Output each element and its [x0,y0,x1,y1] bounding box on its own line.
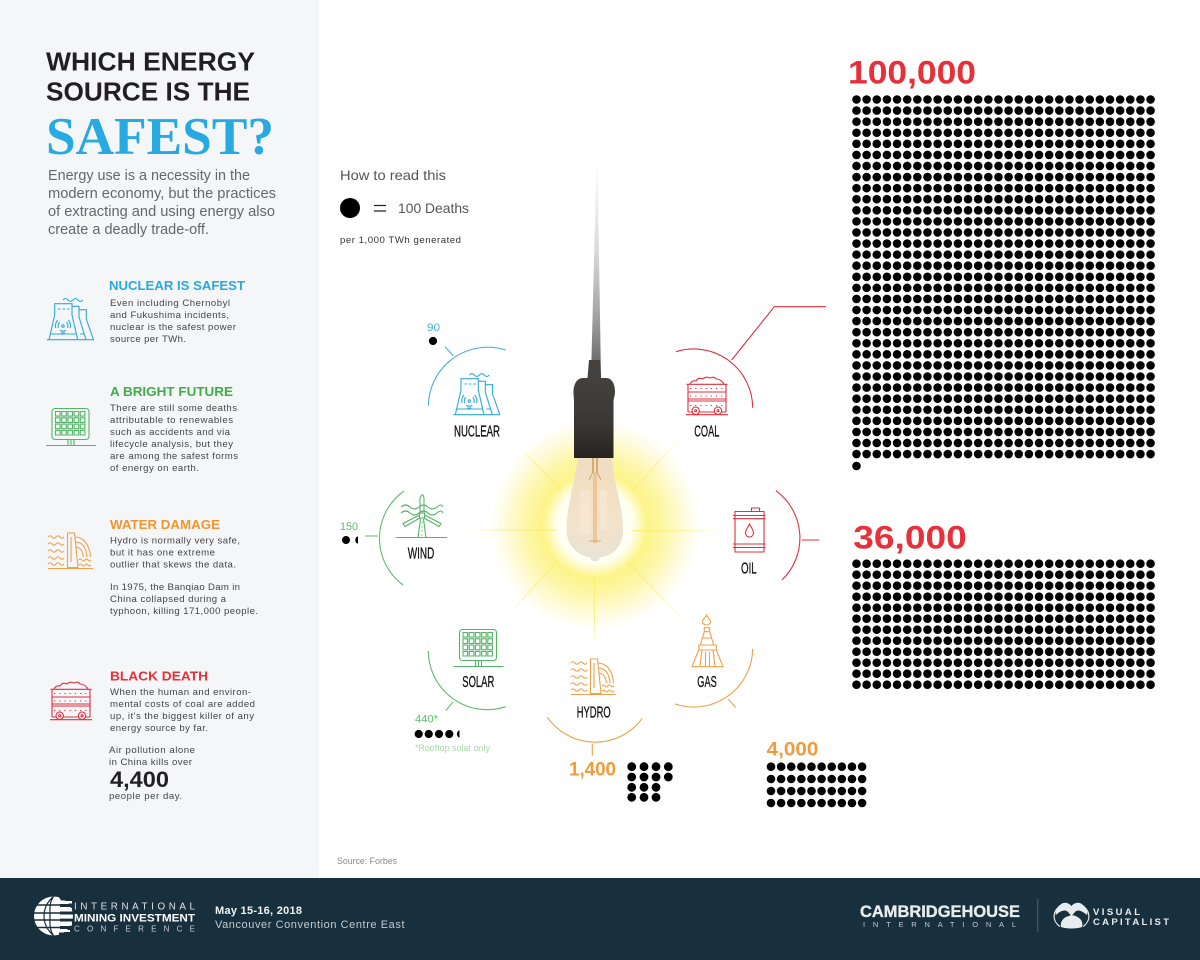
arc and connector [676,307,826,408]
text: nuclear description: source per TWh. [110,334,186,345]
event date and venue: Vancouver Convention Centre East [215,919,404,931]
label: solar: SOLAR [462,674,494,691]
text: renewables description: of energy on earth. [110,463,199,474]
label: gas: GAS [697,674,717,691]
text: renewables description: There are still some deaths [110,403,237,414]
segment: solar [415,630,506,753]
dots [342,536,358,544]
light rays [447,438,727,640]
heading: which energy source is the [46,46,255,106]
source: Source: Forbes [337,856,398,866]
segment: hydro [547,659,673,802]
text: nuclear description: nuclear is the safest power [110,322,237,333]
logo: visual capitalist: CAPITALIST [1093,917,1169,928]
panel: sidebar background [0,0,319,878]
title block [46,46,274,166]
logo: visual capitalist: VISUAL [1093,907,1140,918]
value: 100,000: 100,000 [848,54,976,90]
text: renewables description: attributable to renewables [110,415,233,426]
intro text: modern economy, but the practices [48,186,276,202]
value: 36,000: 36,000 [853,519,967,555]
icon: wind turbine [396,495,447,538]
text: coal description: energy source by far. [110,723,208,734]
value: 440: 440* [415,714,439,726]
label: nuclear: NUCLEAR [454,424,500,441]
icon: nuclear plant [47,298,94,340]
light bulb [567,160,623,561]
legend: how to read this [340,167,469,246]
text: hydro description: but it has one extreme [110,548,215,558]
value block: coal 100,000 [848,54,1151,470]
text: hydro description: China collapsed during a [110,594,227,605]
logo text: international mining investment conference: CONFERENCE [74,924,195,934]
label: coal: COAL [694,424,719,441]
text: coal description [109,687,255,802]
text: coal description: When the human and environ- [110,687,251,698]
label: wind: WIND [408,545,434,562]
text: hydro description: Hydro is normally very safe, [110,536,240,546]
equals sign [374,206,386,211]
logo: mining investment conference globe [33,896,76,937]
logo: cambridge house international: CAMBRIDGEHOUSE [860,903,1020,921]
icon: hydro [571,659,616,694]
footer [0,878,1200,960]
logo: cambridge house international [860,903,1020,929]
text: nuclear description: and Fukushima incidents, [110,310,229,321]
segment: gas [675,615,862,803]
value: 150: 150 [340,521,358,533]
icon: solar [454,630,504,666]
text: nuclear description [110,298,237,345]
light glow [490,420,700,630]
icon: solar panel [46,408,96,446]
heading: which energy source is the: WHICH ENERGY [46,46,255,76]
intro text: of extracting and using energy also [48,204,275,220]
arc and tick [365,491,404,585]
arc and tick [675,649,753,708]
intro text [48,168,276,238]
bulb glass [567,458,623,561]
icon: gas [692,615,723,667]
text: hydro description [110,536,258,617]
legend dot [340,198,360,218]
text: renewables description: such as accidents and via [110,427,231,438]
logo text: international mining investment conference: MINING INVESTMENT [74,912,195,924]
heading: black death: BLACK DEATH [110,668,208,684]
sidebar item: a bright future [46,384,238,474]
heading: water damage: WATER DAMAGE [110,517,220,532]
arc and tick [428,651,506,711]
dots [415,730,460,738]
text: coal description: up, it's the biggest killer of any [110,711,254,722]
segment: coal [676,307,826,441]
icon: coal [686,377,728,415]
segment: nuclear [427,322,506,441]
legend: how to read this: How to read this [340,167,446,183]
heading: safest: SAFEST? [46,108,274,166]
legend: how to read this: per 1,000 TWh generated [340,235,461,246]
intro text: Energy use is a necessity in the [48,168,250,184]
dots [771,767,862,803]
dots [627,762,673,802]
arc and tick [428,347,506,406]
icon: coal cart [50,682,92,720]
text: coal description: people per day. [109,791,182,802]
logo text: international mining investment conference: INTERNATIONAL [74,901,196,912]
icon: nuclear [453,374,500,415]
logo: visual capitalist [1054,903,1169,928]
logo text: international mining investment conference [74,901,196,934]
logo: cambridge house international: INTERNATIONAL [863,920,1016,929]
label: oil: OIL [741,560,757,577]
dot grid [856,100,1151,454]
icon: hydro dam [48,533,93,568]
intro text: create a deadly trade-off. [48,222,209,238]
value: 90: 90 [427,322,440,334]
bulb socket [574,360,615,458]
label: hydro: HYDRO [577,705,611,722]
value: 1,400: 1,400 [569,760,616,781]
text: coal description: Air pollution alone [109,745,195,756]
text: renewables description: lifecycle analysis, but they [110,439,233,450]
last dot [852,462,861,470]
text: renewables description [110,403,238,474]
dot grid [856,564,1151,685]
text: coal description: mental costs of coal are added [110,699,255,710]
sidebar item: nuclear is safest [47,278,245,345]
heading: which energy source is the: SOURCE IS THE [46,76,250,106]
value block: oil 36,000 [853,519,1151,685]
arc and tick [776,491,819,580]
text: hydro description: outlier that skews the data. [110,560,236,570]
text: hydro description: typhoon, killing 171,000 people. [110,606,258,617]
heading: a bright future: A BRIGHT FUTURE [110,384,233,399]
segment: wind [340,491,447,585]
text: coal description: 4,400 [110,767,169,792]
text: hydro description: In 1975, the Banqiao Dam in [110,582,240,593]
bulb cord [591,160,601,378]
bulb filament [580,458,607,543]
legend: how to read this: 100 Deaths [398,200,469,216]
arc and tick [547,717,642,756]
icon: oil barrel [733,508,766,552]
footnote: rooftop solar only: *Rooftop solar only [415,743,491,753]
text: renewables description: are among the safest forms [110,451,238,462]
text: nuclear description: Even including Chernobyl [110,298,230,309]
sidebar item: water damage [48,517,258,617]
heading: nuclear is safest: NUCLEAR IS SAFEST [109,278,245,293]
event date and venue: May 15-16, 2018 [215,905,302,917]
sidebar item: black death [50,668,255,802]
segment: oil [733,491,819,580]
divider [1037,899,1038,932]
text: coal description: in China kills over [109,757,193,768]
dot [429,337,437,345]
event date and venue [215,905,404,931]
value: 4,000: 4,000 [767,740,818,761]
